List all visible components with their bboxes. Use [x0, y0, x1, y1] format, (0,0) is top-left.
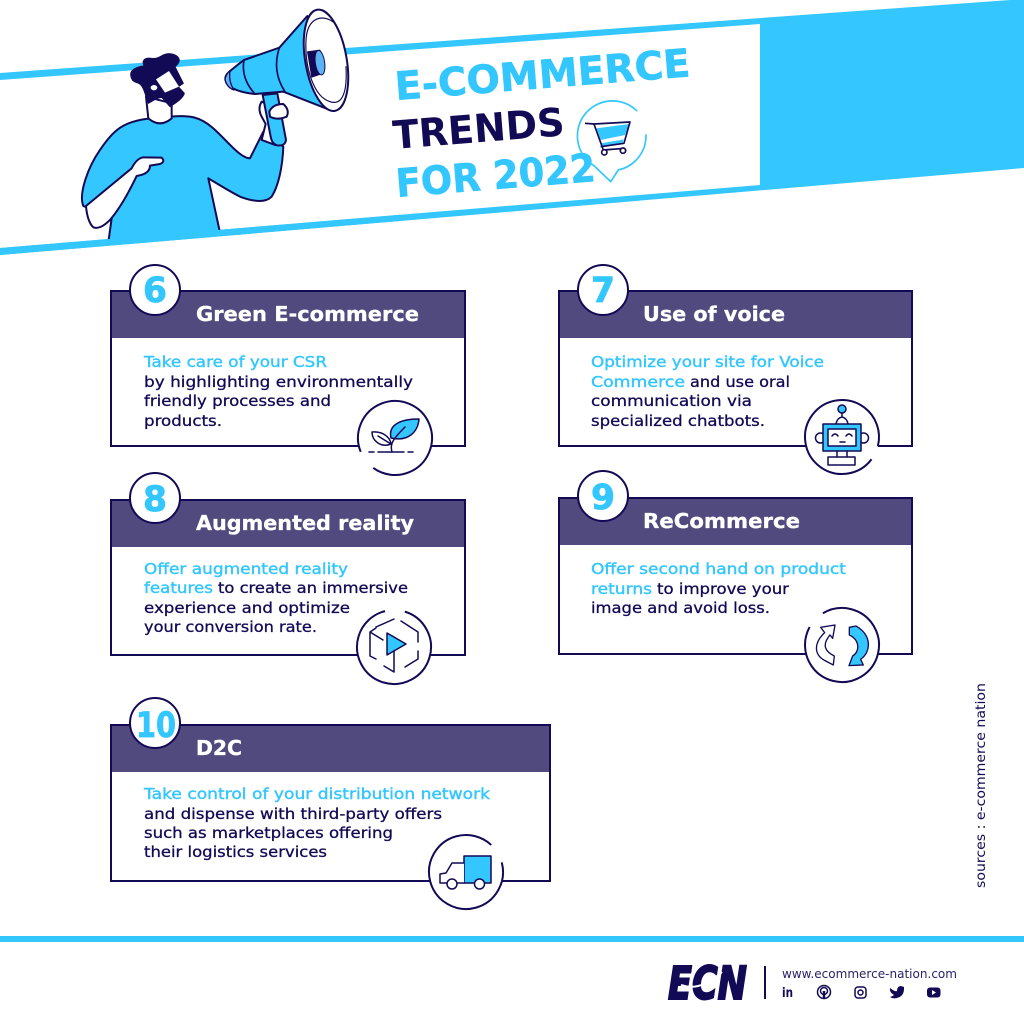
text block — [144, 560, 408, 636]
heading: Green E-commerce — [196, 302, 419, 326]
text block: and dispense with third-party offers — [144, 805, 442, 823]
text block: your conversion rate. — [144, 618, 317, 636]
icon: linkedin: in — [782, 986, 793, 1001]
number 9 — [578, 471, 628, 521]
number 8: 8 — [143, 480, 167, 520]
text block — [591, 560, 846, 617]
text block: image and avoid loss. — [591, 599, 770, 617]
title: TRENDS — [391, 100, 566, 159]
banner stripe over figure — [0, 215, 400, 255]
number 8 — [130, 473, 180, 523]
cart speech bubble icon — [577, 101, 646, 182]
panel: 9 ReCommerce — [559, 471, 912, 696]
text block: to improve your — [657, 580, 790, 598]
text block — [143, 785, 490, 861]
number 9: 9 — [591, 478, 615, 518]
panel: 8 Augmented reality — [111, 473, 465, 693]
icon: plant — [347, 390, 443, 486]
neck — [146, 97, 172, 123]
megaphone — [225, 6, 355, 146]
logo divider — [764, 966, 766, 999]
text block: Commerce — [591, 373, 685, 391]
text block: products. — [144, 412, 222, 430]
footer rule — [0, 936, 1024, 942]
icon: robot — [790, 385, 894, 489]
arm and pointing hand — [86, 157, 163, 228]
driver — [307, 50, 324, 77]
number 10: 10 — [136, 706, 176, 746]
icon: delivery truck — [421, 827, 511, 917]
number 6: 6 — [143, 271, 167, 311]
cone tip — [225, 71, 234, 90]
heading: Augmented reality — [196, 511, 414, 535]
number 7 — [578, 265, 628, 315]
text block: Offer second hand on product — [591, 560, 846, 578]
head — [131, 54, 184, 123]
heading: Use of voice — [643, 302, 785, 326]
source note: sources : e-commerce nation — [973, 683, 989, 888]
text block: to create an immersive — [218, 579, 408, 597]
text block: features — [144, 579, 213, 597]
text block: their logistics services — [144, 843, 327, 861]
icon: youtube — [927, 988, 940, 998]
handle — [263, 93, 286, 146]
icon: instagram — [855, 987, 866, 998]
front hand — [269, 104, 288, 119]
icon: twitter — [890, 986, 904, 998]
text block — [143, 353, 413, 430]
text block: friendly processes and — [144, 392, 331, 410]
icon: podcast — [818, 986, 830, 999]
text block: Take control of your distribution network — [143, 785, 490, 803]
number 6 — [130, 265, 180, 315]
website: www.ecommerce-nation.com — [782, 967, 957, 981]
title — [391, 41, 692, 207]
title: FOR 2022 — [394, 146, 597, 207]
cone — [225, 16, 332, 110]
heading: ReCommerce — [643, 509, 800, 533]
text block: returns — [591, 580, 652, 598]
icon: return arrows — [791, 594, 893, 696]
text block: Take care of your CSR — [143, 353, 327, 371]
number 10 — [130, 698, 180, 748]
text block: specialized chatbots. — [591, 412, 765, 430]
text block: communication via — [591, 392, 752, 410]
text block: such as marketplaces offering — [144, 824, 393, 842]
number 7: 7 — [591, 271, 615, 311]
logo: ECN — [668, 957, 747, 1010]
heading: D2C — [196, 736, 242, 760]
panel: 6 Green E-commerce — [111, 265, 465, 486]
icon: augmented reality cube — [348, 601, 440, 693]
banner — [0, 0, 1024, 255]
panel: 7 Use of voice — [559, 265, 912, 489]
text block — [591, 353, 824, 430]
text block: and use oral — [690, 373, 790, 391]
hair and beard — [131, 54, 184, 107]
text block: by highlighting environmentally — [144, 373, 413, 391]
mouth — [297, 6, 355, 114]
text block: Offer augmented reality — [144, 560, 348, 578]
social icons — [782, 986, 940, 1001]
ear — [151, 85, 157, 90]
title: E-COMMERCE — [393, 41, 692, 110]
face — [156, 71, 179, 93]
torso and raised arm — [82, 116, 283, 242]
text block: Optimize your site for Voice — [591, 353, 824, 371]
panel: 10 D2C — [111, 698, 550, 917]
fingers behind handle — [259, 102, 275, 145]
illustration: man with megaphone — [82, 6, 355, 242]
text block: experience and optimize — [144, 599, 350, 617]
